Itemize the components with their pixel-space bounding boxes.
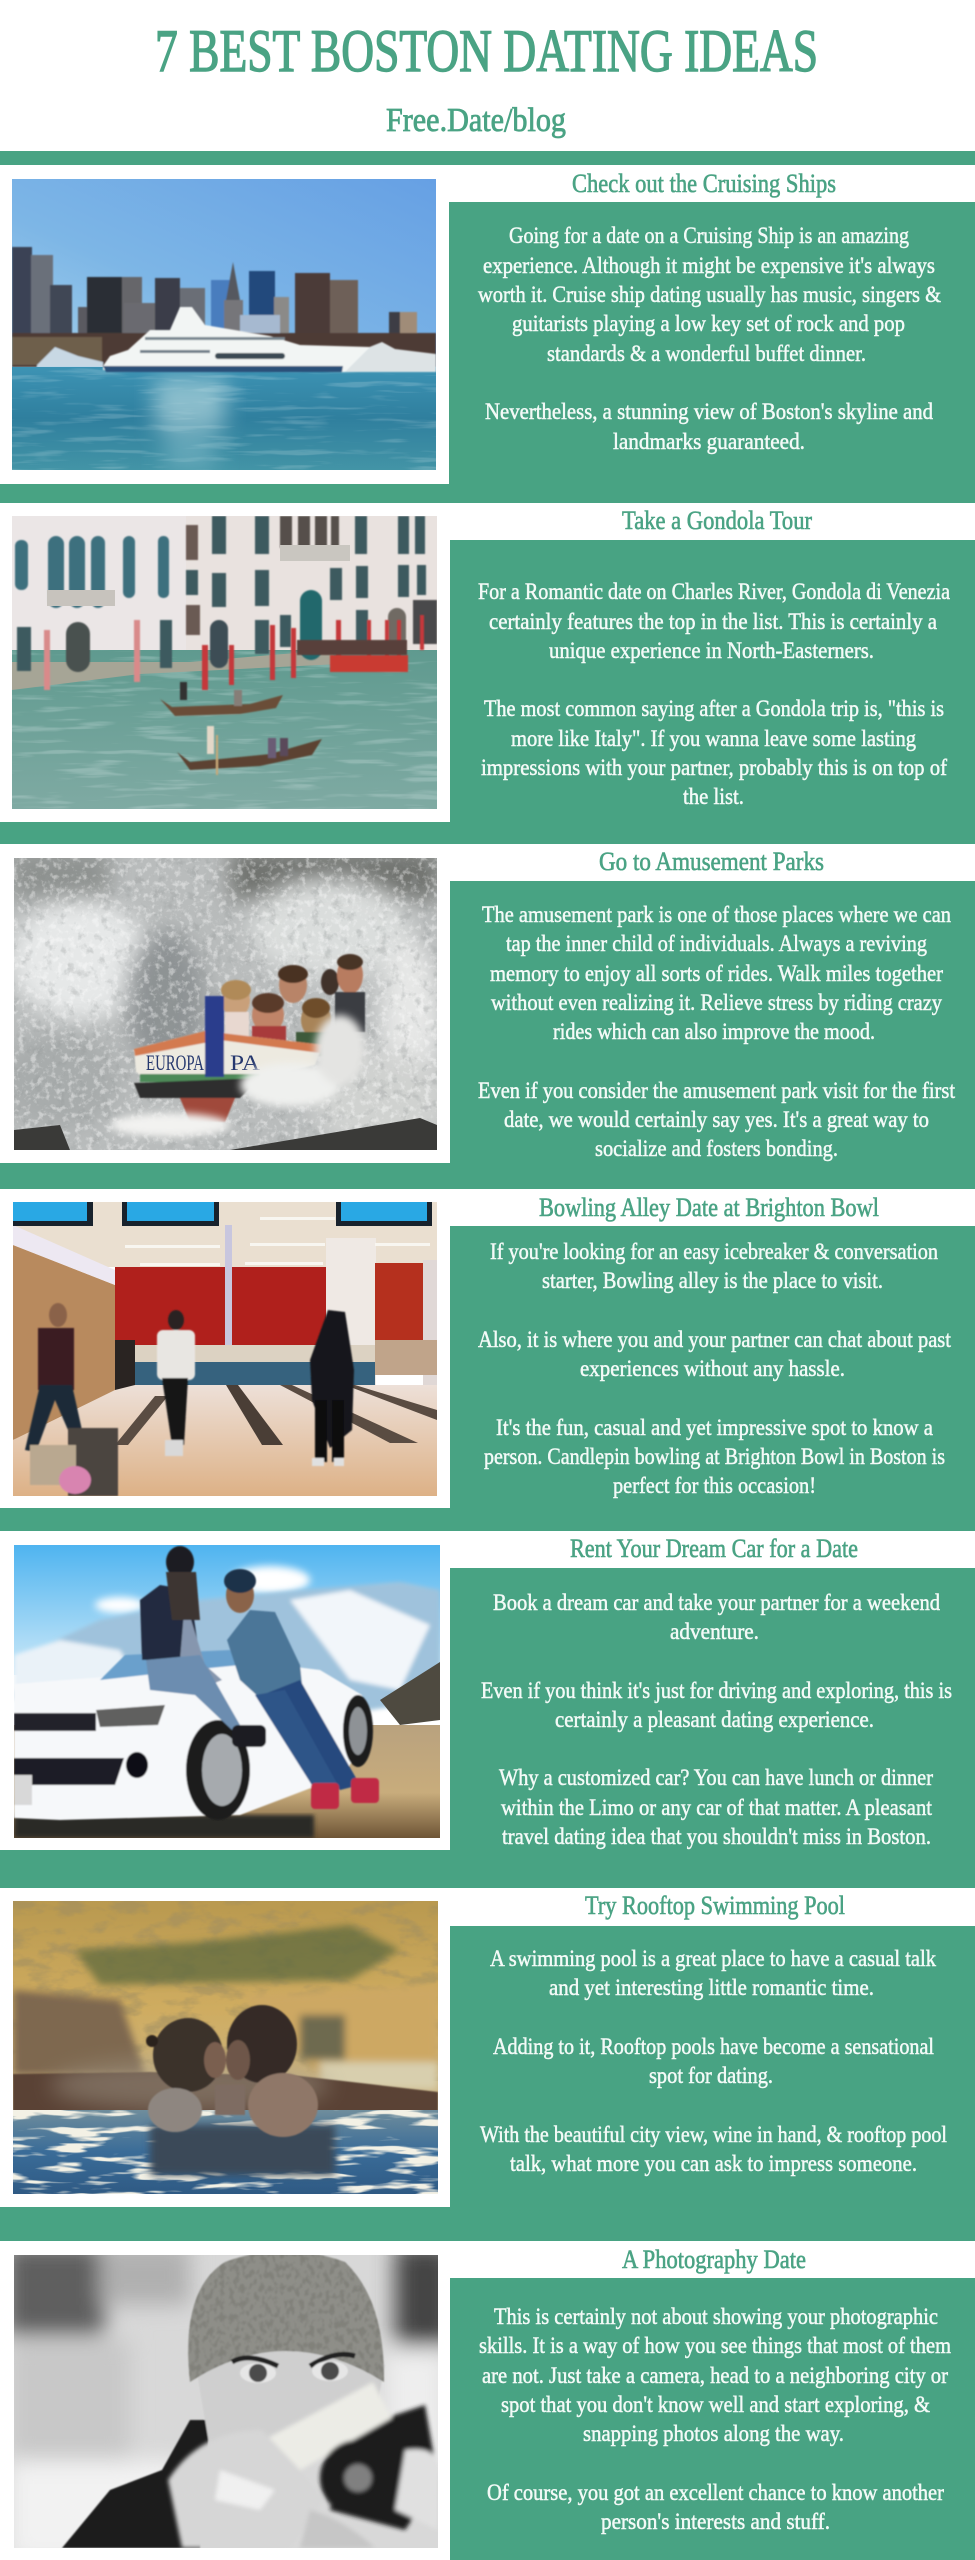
photo: woman with a camera bbox=[14, 2255, 438, 2548]
body text: the list. bbox=[683, 784, 744, 809]
photo: couple on a white car bbox=[14, 1545, 440, 1838]
text panel bbox=[450, 2278, 975, 2560]
body text: rides which can also improve the mood. bbox=[553, 1019, 875, 1044]
body text: snapping photos along the way. bbox=[583, 2421, 844, 2446]
divider band 3 bbox=[0, 1163, 975, 1189]
section 1: cruising ships bbox=[12, 169, 975, 484]
body text: talk, what more you can ask to impress someone. bbox=[510, 2151, 917, 2176]
body text: experiences without any hassle. bbox=[580, 1356, 845, 1381]
body text: tap the inner child of individuals. Always a reviving bbox=[506, 931, 927, 956]
body text: standards & a wonderful buffet dinner. bbox=[547, 341, 866, 366]
text panel bbox=[450, 540, 975, 823]
body text: and yet interesting little romantic time. bbox=[549, 1975, 874, 2000]
body text: landmarks guaranteed. bbox=[613, 429, 805, 454]
body text: Nevertheless, a stunning view of Boston's skyline and bbox=[485, 399, 933, 424]
photo: log flume splash: EUROPA bbox=[146, 1050, 204, 1075]
body text bbox=[481, 1590, 952, 1849]
divider band 5 bbox=[0, 1850, 975, 1888]
body text: starter, Bowling alley is the place to visit. bbox=[542, 1268, 883, 1293]
heading: Try Rooftop Swimming Pool bbox=[585, 1891, 845, 1920]
divider band 4 bbox=[0, 1508, 975, 1531]
divider band 1 bbox=[0, 484, 975, 503]
body text: experience. Although it might be expensive it's always bbox=[483, 253, 935, 278]
photo: cruise ship and Boston skyline bbox=[12, 179, 436, 470]
text panel bbox=[449, 202, 975, 484]
text panel bbox=[450, 1226, 975, 1508]
heading: Bowling Alley Date at Brighton Bowl bbox=[539, 1193, 879, 1222]
photo: log flume splash: PA bbox=[230, 1050, 260, 1075]
body text: Why a customized car? You can have lunch or dinner bbox=[499, 1765, 933, 1790]
heading: Rent Your Dream Car for a Date bbox=[570, 1534, 858, 1563]
body text bbox=[478, 1239, 952, 1498]
body text: within the Limo or any car of that matter. A pleasant bbox=[501, 1795, 933, 1820]
photo: bowling alley bbox=[13, 1202, 437, 1496]
body text bbox=[480, 1946, 947, 2176]
body text bbox=[479, 2304, 951, 2534]
heading: Take a Gondola Tour bbox=[622, 506, 812, 535]
photo: gondolas on a canal bbox=[12, 516, 437, 809]
body text: Going for a date on a Cruising Ship is an amazing bbox=[509, 223, 909, 248]
photo: couple in a pool bbox=[13, 1901, 438, 2194]
heading: Go to Amusement Parks bbox=[599, 847, 824, 876]
body text: person's interests and stuff. bbox=[601, 2509, 830, 2534]
text panel bbox=[450, 1926, 975, 2207]
body text bbox=[478, 902, 956, 1161]
section 4: bowling bbox=[13, 1193, 975, 1508]
section 7: photography bbox=[5, 2245, 975, 2560]
body text: perfect for this occasion! bbox=[613, 1473, 816, 1498]
heading: Check out the Cruising Ships bbox=[572, 169, 836, 198]
body text: more like Italy". If you wanna leave some lasting bbox=[511, 726, 916, 751]
photo: log flume splash bbox=[0, 850, 450, 1150]
section 6: rooftop pool bbox=[13, 1891, 975, 2207]
body text bbox=[478, 223, 941, 454]
header band bbox=[0, 151, 975, 165]
divider band 2 bbox=[0, 822, 975, 844]
body text: It's the fun, casual and yet impressive spot to know a bbox=[496, 1415, 933, 1440]
body text bbox=[478, 579, 950, 809]
body text: unique experience in North-Easterners. bbox=[549, 638, 874, 663]
section 3: amusement parks bbox=[0, 847, 975, 1163]
subtitle: Free.Date/blog bbox=[386, 102, 566, 139]
body text: travel dating idea that you shouldn't miss in Boston. bbox=[502, 1824, 931, 1849]
body text: spot for dating. bbox=[649, 2063, 773, 2088]
section 2: gondola bbox=[12, 506, 975, 823]
body text: date, we would certainly say yes. It's a great way to bbox=[504, 1107, 929, 1132]
body text: guitarists playing a low key set of rock and pop bbox=[512, 311, 905, 336]
body text: spot that you don't know well and start exploring, & bbox=[501, 2392, 930, 2417]
section 5: dream car bbox=[14, 1534, 975, 1851]
body text: socialize and fosters bonding. bbox=[595, 1136, 838, 1161]
divider band 6 bbox=[0, 2207, 975, 2241]
body text: certainly features the top in the list. This is certainly a bbox=[489, 609, 937, 634]
text panel bbox=[450, 1568, 975, 1851]
heading: A Photography Date bbox=[622, 2245, 806, 2274]
body text: adventure. bbox=[670, 1619, 759, 1644]
text panel bbox=[450, 881, 975, 1163]
body text: certainly a pleasant dating experience. bbox=[555, 1707, 874, 1732]
